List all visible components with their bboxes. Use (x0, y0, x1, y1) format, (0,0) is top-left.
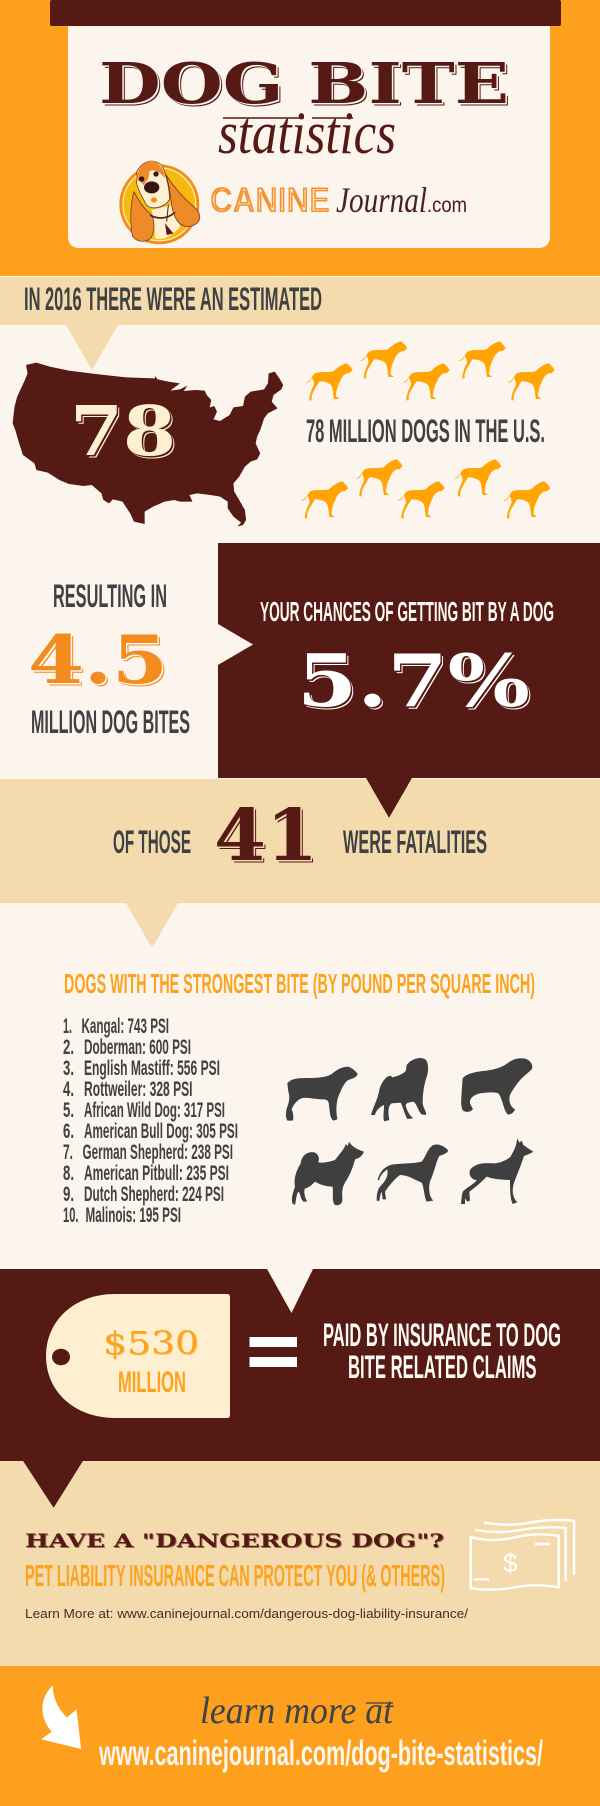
ranked list: Dutch Shepherd: 224 PSI (84, 1183, 224, 1206)
number: 5.7%: 5.7% (297, 638, 530, 723)
ranked list: American Bull Dog: 305 PSI (84, 1120, 238, 1143)
panel: resulting bites (28, 578, 190, 740)
dog silhouettes: bottom row (292, 1138, 533, 1205)
logo text: .com: .com (427, 194, 467, 217)
title card (68, 26, 550, 248)
ranked list: English Mastiff: 556 PSI (84, 1057, 220, 1080)
ranked list: 2. (63, 1036, 74, 1059)
us map (13, 363, 283, 527)
text: paid by insurance (323, 1317, 561, 1385)
price tag (46, 1294, 230, 1418)
ranked list: 4. (63, 1078, 74, 1101)
ranked list: American Pitbull: 235 PSI (84, 1162, 229, 1185)
ranked list: 8. (63, 1162, 74, 1185)
banner text: IN 2016 THERE WERE AN ESTIMATED (24, 281, 322, 317)
equals sign (250, 1337, 297, 1367)
ranked list: 5. (63, 1099, 74, 1122)
ranked list: Doberman: 600 PSI (84, 1036, 191, 1059)
ranked list: African Wild Dog: 317 PSI (84, 1099, 225, 1122)
logo text: canine: CANINE (210, 181, 330, 220)
ranked list: 7. (63, 1141, 73, 1164)
ranked list: 3. (63, 1057, 74, 1080)
icon: money stack (471, 1520, 574, 1590)
ranked list: 6. (63, 1120, 74, 1143)
icon row: orange dogs bottom (302, 459, 550, 518)
logo text: journal: Journal (336, 180, 427, 220)
heading: dangerous dog: HAVE A "DANGEROUS DOG"? (25, 1530, 444, 1552)
ranked list: German Shepherd: 238 PSI (82, 1141, 233, 1164)
dollar sign: $ (503, 1548, 518, 1578)
ranked list: Kangal: 743 PSI (82, 1015, 169, 1038)
ranked list (63, 1015, 238, 1227)
script: learn more at: learn more at (200, 1690, 394, 1732)
ranked list: 1. (63, 1015, 72, 1038)
number: 4.5: 4.5 (28, 621, 168, 699)
subtitle: statistics: statistics (218, 100, 396, 166)
panel: dangerous dog (0, 1461, 600, 1666)
ranked list: 10. (63, 1204, 78, 1227)
panel: estimated banner (0, 277, 600, 325)
text: resulting in: RESULTING IN (53, 578, 167, 614)
icon row: orange dogs top (306, 341, 555, 400)
number: 41: 41 (214, 793, 318, 877)
panel: fatalities: OF THOSE (113, 824, 191, 860)
panel: fatalities (0, 779, 600, 948)
panel: footer (0, 1666, 600, 1806)
arrow (41, 1686, 81, 1749)
learn more link: Learn More at: www.caninejournal.com/dangerous-dog-liability-insurance/ (25, 1606, 468, 1621)
panel: header (0, 0, 600, 276)
logo: basset hound (121, 161, 200, 243)
amount: $530: $530 (103, 1324, 199, 1362)
number: 78: 78 (70, 392, 176, 472)
panel: strongest bite (63, 968, 535, 1227)
title: dog bite: DOG BITE (99, 51, 509, 117)
banner pointer (66, 325, 118, 370)
ranked list: Rottweiler: 328 PSI (84, 1078, 192, 1101)
dog silhouettes: top row (286, 1058, 532, 1121)
panel: insurance claims (0, 1269, 600, 1508)
ranked list: Malinois: 195 PSI (86, 1204, 181, 1227)
header bar (50, 0, 561, 26)
text: million dog bites: MILLION DOG BITES (31, 704, 190, 740)
ranked list: 9. (63, 1183, 74, 1206)
panel: 78 million dogs (13, 325, 555, 527)
panel: chances of being bitten (218, 543, 600, 818)
amount unit: million: MILLION (118, 1366, 186, 1399)
